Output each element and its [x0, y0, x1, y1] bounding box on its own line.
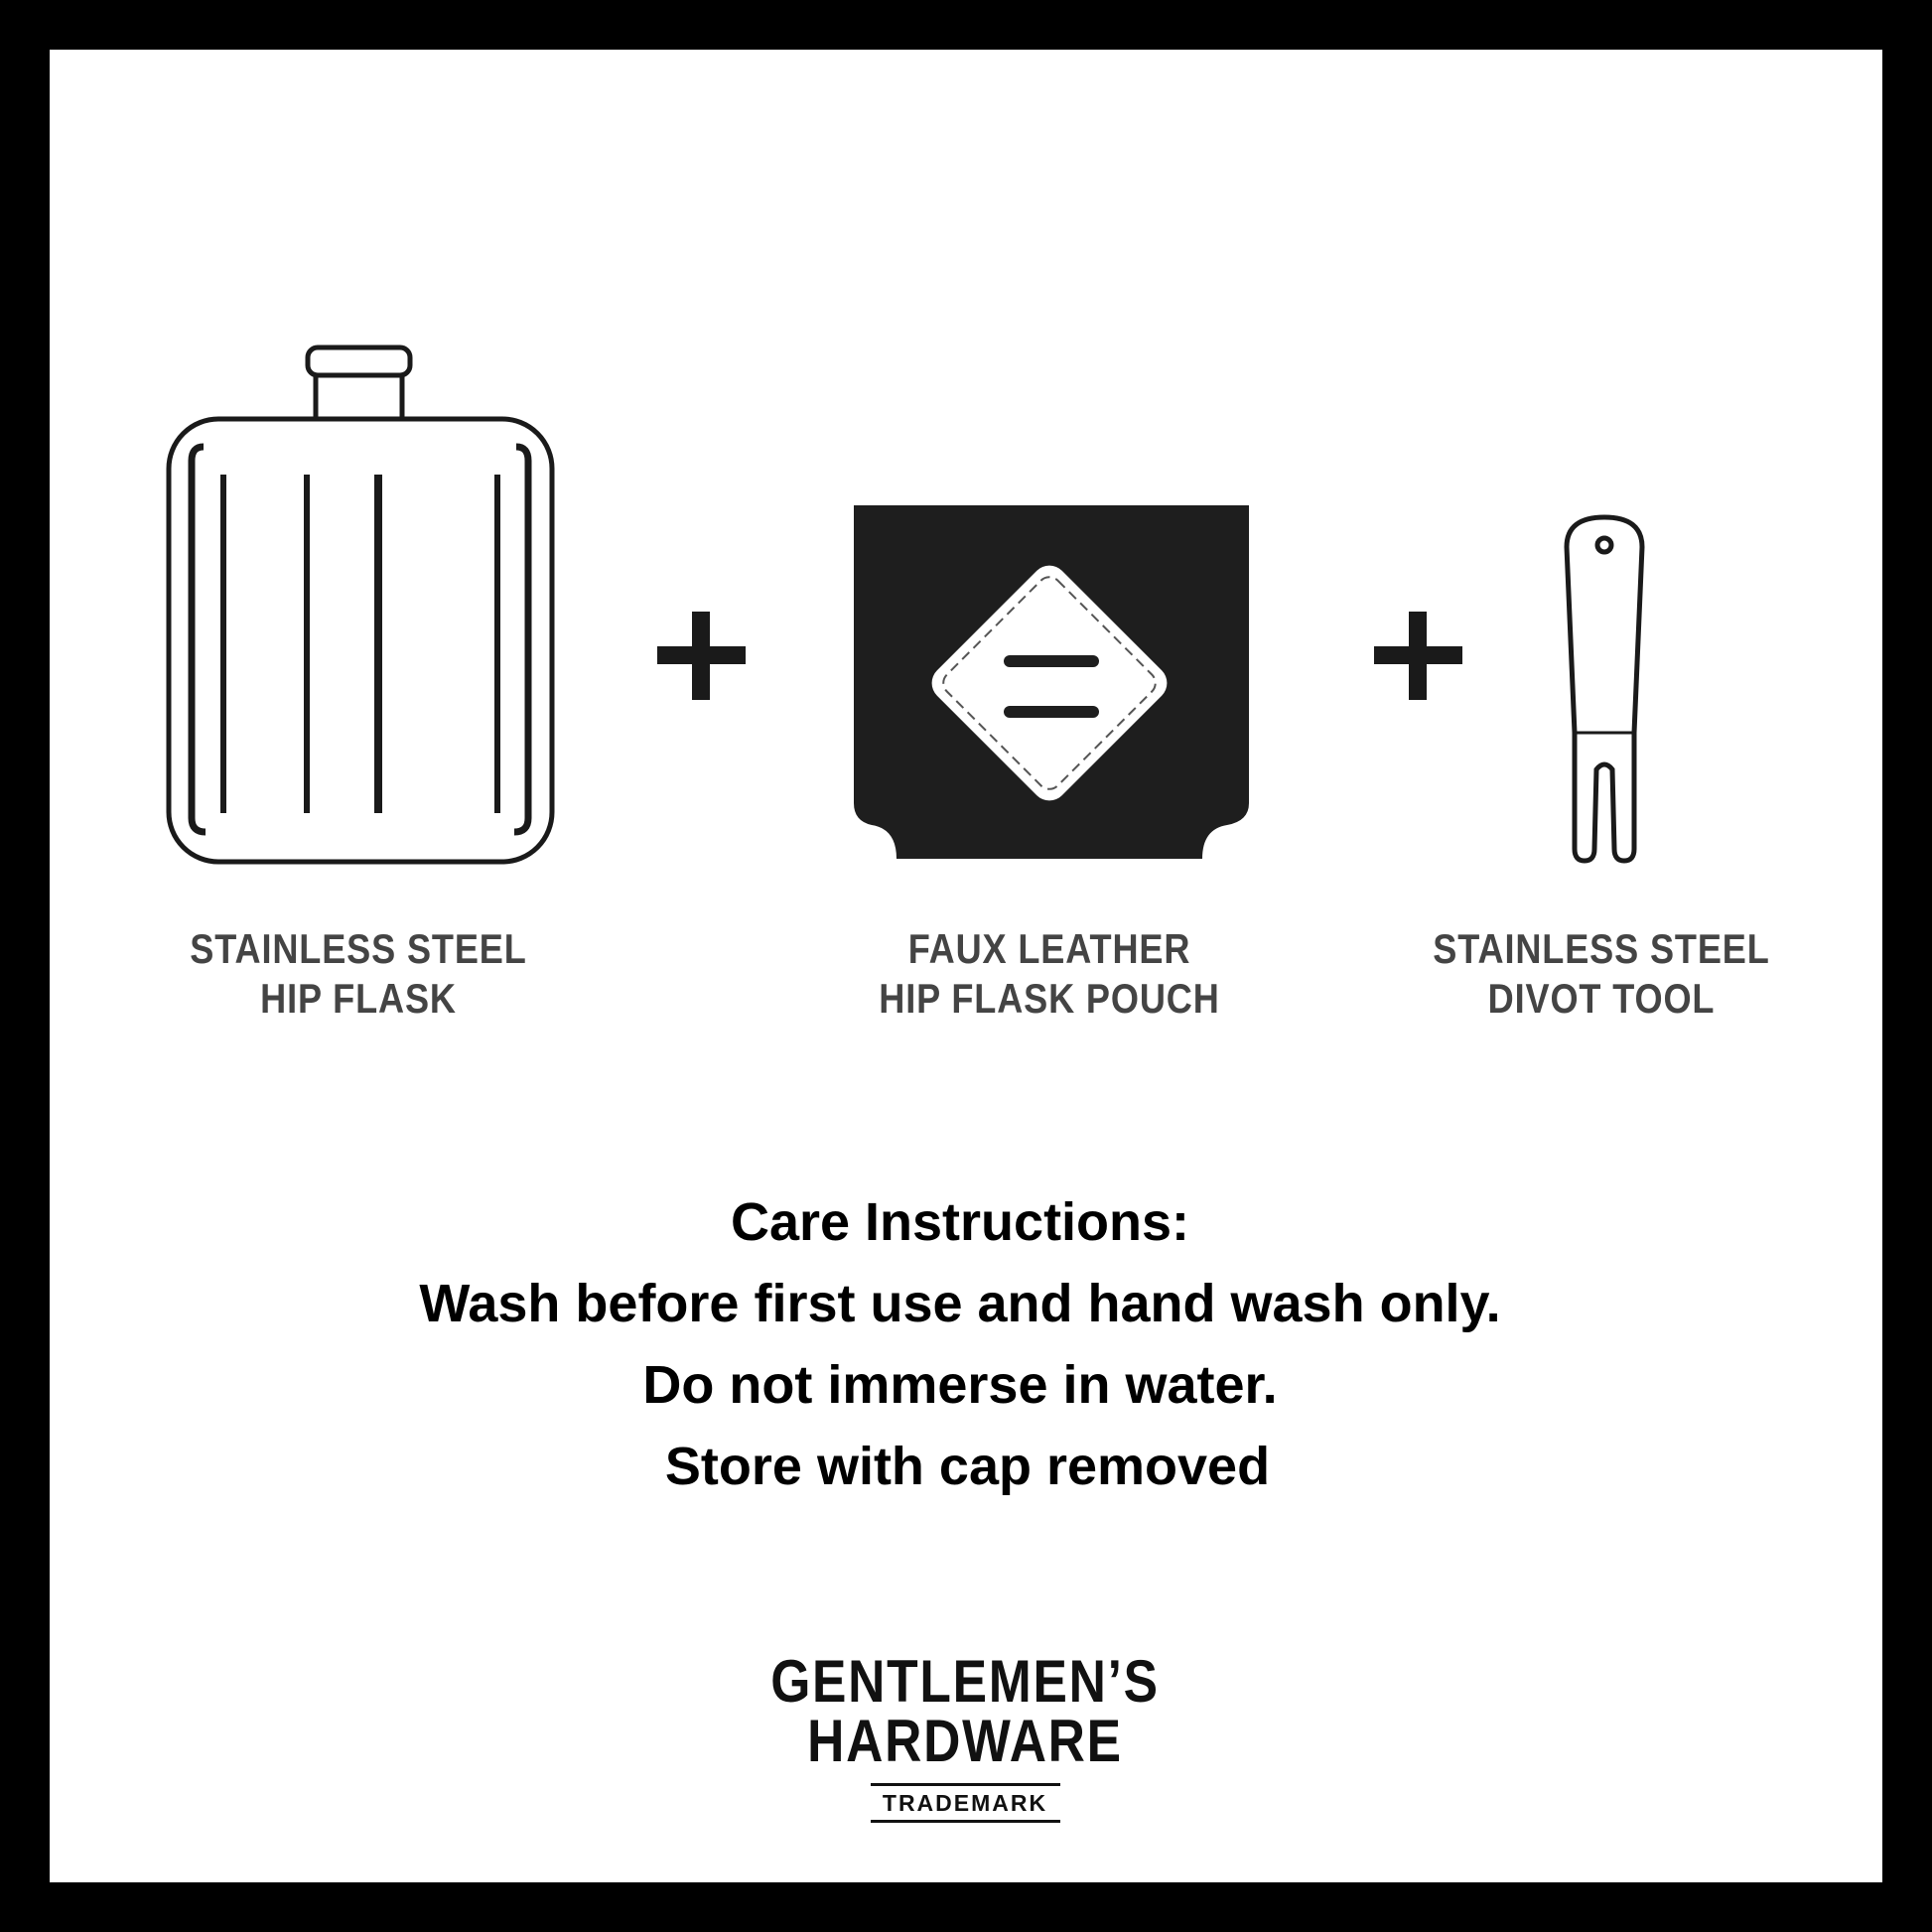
text: care instructions: Store with cap removed — [665, 1437, 1270, 1496]
logo: gentlemen's hardware — [770, 1648, 1160, 1823]
label: pouch: HIP FLASK POUCH — [879, 975, 1220, 1022]
label: pouch: FAUX LEATHER — [908, 925, 1190, 972]
logo: gentlemen's hardware: GENTLEMEN’S — [770, 1648, 1160, 1715]
icon: plus 1 — [657, 612, 746, 700]
logo: gentlemen's hardware: TRADEMARK — [883, 1790, 1047, 1816]
label: hip flask: STAINLESS STEEL — [190, 925, 527, 972]
icon: pouch — [854, 505, 1249, 859]
text: care instructions: Wash before first use and hand wash only. — [419, 1274, 1501, 1333]
label: pouch — [879, 925, 1220, 1022]
logo: gentlemen's hardware: HARDWARE — [807, 1708, 1123, 1774]
label: hip flask: HIP FLASK — [260, 975, 457, 1022]
label: divot tool: DIVOT TOOL — [1488, 975, 1715, 1022]
label: divot tool: STAINLESS STEEL — [1433, 925, 1770, 972]
label: hip flask — [190, 925, 527, 1022]
icon: plus 2 — [1374, 612, 1462, 700]
text: care instructions: Do not immerse in water. — [642, 1355, 1278, 1415]
label: divot tool — [1433, 925, 1770, 1022]
text: care instructions — [419, 1192, 1501, 1496]
icon: divot tool — [1565, 514, 1644, 864]
text: care instructions: Care Instructions: — [731, 1192, 1189, 1252]
